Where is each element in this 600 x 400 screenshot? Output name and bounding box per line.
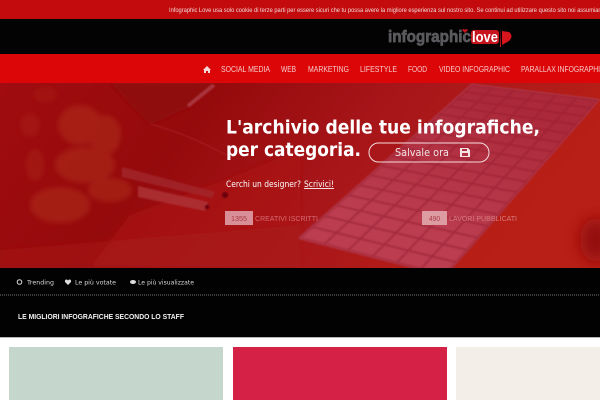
logo: love: [472, 29, 498, 46]
keys grid: [314, 94, 572, 268]
notebook: [22, 84, 246, 268]
card: green: [9, 347, 223, 400]
menu items: LIFESTYLE: [360, 65, 397, 74]
red plant shadow: [580, 218, 600, 262]
menu items: WEB: [281, 65, 296, 74]
tab: most voted: Le più votate: [75, 278, 116, 286]
hero photo background: [0, 83, 600, 275]
section heading: LE MIGLIORI INFOGRAFICHE SECONDO LO STAFF: [18, 312, 184, 321]
headline: [226, 116, 540, 161]
tab: most viewed: Le più visualizzate: [138, 278, 194, 286]
icon: save: [460, 148, 470, 157]
logo: infographic: [388, 27, 471, 46]
card: cream: [456, 347, 600, 400]
button: Salvale ora: [369, 143, 489, 162]
menu items: VIDEO INFOGRAPHIC: [439, 65, 510, 74]
stat: creatives: CREATIVI ISCRITTI: [255, 214, 318, 223]
navigation bar: [0, 54, 600, 83]
stat: published works: 490: [429, 216, 440, 223]
tab: Trending: Trending: [26, 278, 54, 286]
icon: home: [203, 66, 211, 73]
menu items: SOCIAL MEDIA: [221, 65, 271, 74]
flower: [23, 105, 132, 223]
designer call to action: Scrivici!: [304, 180, 334, 190]
pens: [122, 167, 228, 211]
menu items: [221, 65, 600, 74]
headline: L'archivio delle tue infografiche,: [226, 116, 540, 138]
menu items: FOOD: [408, 65, 427, 74]
stat: published works: LAVORI PUBBLICATI: [449, 214, 517, 223]
cookie notice bar: [0, 0, 600, 19]
designer call to action: Cerchi un designer?: [226, 180, 301, 190]
stat: creatives: [225, 211, 318, 225]
headline: per categoria.: [226, 139, 361, 161]
menu items: MARKETING: [308, 65, 349, 74]
keyboard: [300, 85, 598, 275]
black tabs band: [0, 268, 600, 338]
header bar with logo: [0, 19, 600, 54]
card: crimson: [233, 347, 447, 400]
stat: creatives: 1355: [231, 216, 247, 223]
stat: published works: [422, 211, 517, 225]
button: Salvale ora: Salvale ora: [395, 147, 449, 159]
